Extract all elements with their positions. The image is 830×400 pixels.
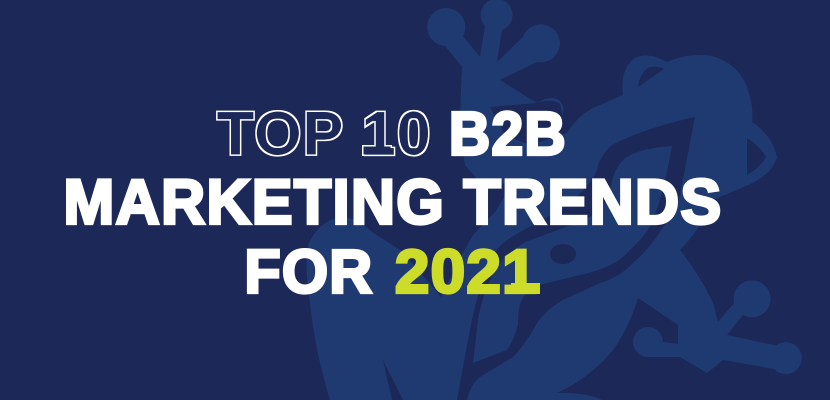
title line 1 outlined: TOP 10 [217,99,432,168]
frog right loop hole [747,138,766,175]
title line 2: MARKETING TRENDS [64,167,722,237]
icon: frog silhouette [307,0,802,400]
title line 3 white: FOR [244,237,374,306]
title [64,99,722,306]
frog gap under arm [490,101,567,145]
frog body stripe [457,117,695,400]
frog eye [550,244,576,264]
frog upper eye hole [638,67,664,87]
title line 1 solid: B2B [449,99,567,168]
title line 3 lime: 2021 [395,237,538,306]
